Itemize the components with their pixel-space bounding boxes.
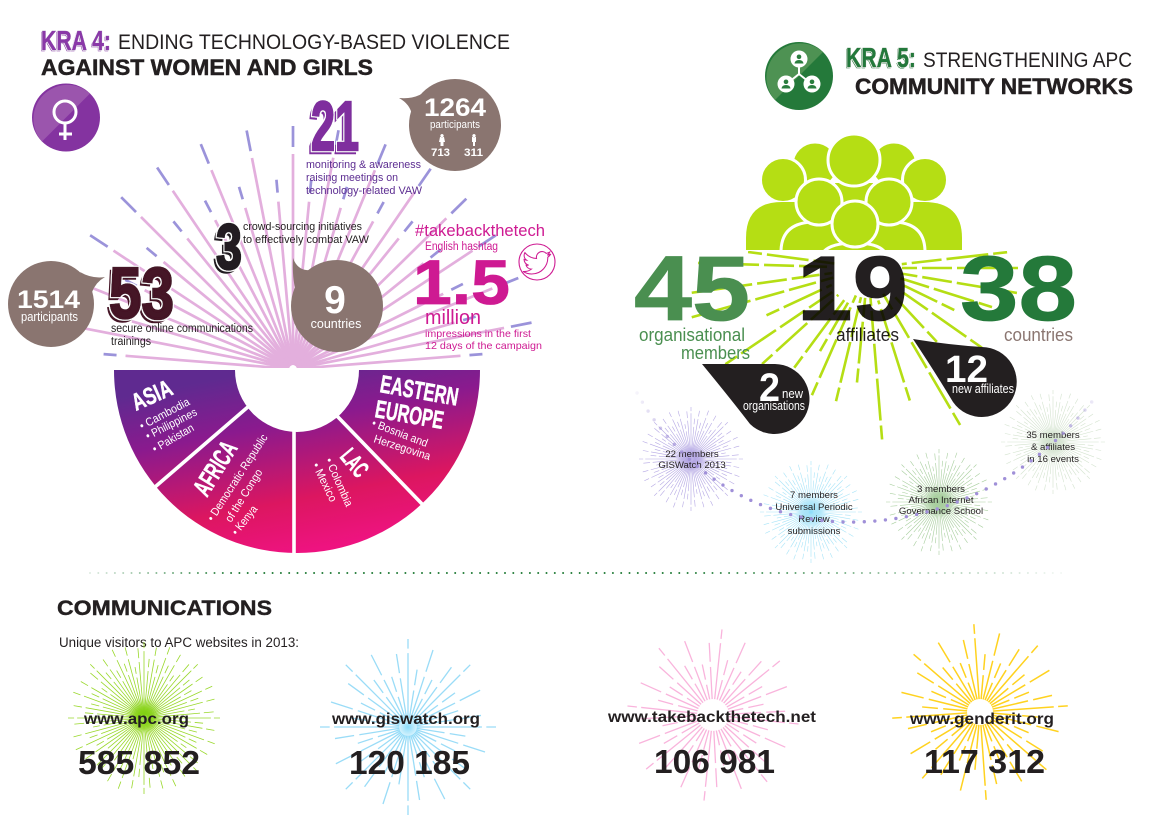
heading: Communications <box>57 597 299 650</box>
callout: 1264 participants <box>399 79 501 171</box>
segment: Eastern Europe: Herzegovina <box>372 433 432 463</box>
stat: 53 secure online communications trainings: secure online communications <box>111 323 253 335</box>
burst: African Internet Governance School members <box>879 442 999 562</box>
callout: 1264 participants: 1264 <box>424 94 486 122</box>
icon: female figure <box>439 134 445 146</box>
burst: genderit.org visitors: www.genderit.org <box>909 711 1054 728</box>
burst: GISWatch members <box>632 400 750 518</box>
burst: GISWatch members: GISWatch 2013 <box>658 460 726 471</box>
burst: GISWatch members: 22 members <box>665 449 719 460</box>
segment: LAC: LAC <box>334 444 374 483</box>
callout: 2 new organisations: 2 <box>759 366 780 410</box>
burst: genderit.org visitors: 117 312 <box>924 743 1045 780</box>
burst: Universal Periodic Review members: Universal Periodic <box>775 502 853 513</box>
segment: Asia <box>127 375 199 456</box>
chart: regional semicircle <box>114 370 480 556</box>
callout: 2 new organisations <box>702 364 809 434</box>
heading: KRA 4: AGAINST WOMEN AND GIRLS <box>41 55 373 80</box>
stat: 38 countries: 38 <box>960 238 1077 340</box>
stat: takebackthetech hashtag: 1.5 <box>413 248 510 318</box>
segment: Eastern Europe <box>370 370 461 463</box>
icon: community network <box>765 42 833 110</box>
chart: radiating lime rays <box>692 252 1018 439</box>
callout: 2 new organisations: new <box>782 387 804 401</box>
stat: 19 affiliates: 19 <box>797 238 908 340</box>
stat: 3 crowd-sourcing initiatives: crowd-sourcing initiatives <box>243 221 362 233</box>
callout: 1514 participants: participants <box>21 310 78 324</box>
callout: 2 new organisations: organisations <box>743 399 805 413</box>
burst: Universal Periodic Review members: Review <box>798 514 830 525</box>
segment: Eastern Europe: EASTERN <box>378 370 461 412</box>
segment: Africa: of the Congo <box>223 467 265 525</box>
burst: apc.org visitors: www.apc.org <box>83 711 189 728</box>
heading: KRA 5: COMMUNITY NETWORKS <box>855 74 1133 99</box>
callout: 12 new affiliates: new affiliates <box>952 382 1014 396</box>
segment: LAC: • Mexico <box>309 461 339 504</box>
burst: giswatch.org visitors <box>315 634 501 818</box>
segment: Asia: ASIA <box>127 375 177 416</box>
callout: 9 countries: countries <box>311 317 361 331</box>
burst: giswatch.org visitors: www.giswatch.org <box>331 711 480 728</box>
stat: takebackthetech hashtag: English hashtag <box>425 241 498 253</box>
burst: genderit.org visitors <box>881 613 1079 811</box>
callout: 1264 participants: participants <box>430 119 480 131</box>
segment: Eastern Europe: EUROPE <box>373 395 446 435</box>
heading: KRA 5: KRA 5: <box>846 42 916 73</box>
burst: events members <box>994 383 1112 501</box>
burst: Universal Periodic Review members <box>754 455 868 569</box>
callout: 12 new affiliates: 12 <box>945 349 988 391</box>
icon: crowd of people <box>746 136 962 250</box>
burst: African Internet Governance School members: 3 members <box>917 484 965 495</box>
stat: 45 organisational members: 45 <box>634 238 750 340</box>
segment: Asia: • Philippines <box>144 406 199 443</box>
heading: KRA 5: STRENGTHENING APC <box>923 49 1132 72</box>
callout: 1514 participants: 1514 <box>17 286 80 314</box>
stat: 38 countries: countries <box>1004 325 1073 345</box>
segment: Asia: • Cambodia <box>138 396 192 433</box>
burst: apc.org visitors: 585 852 <box>78 744 200 781</box>
chart: radiating activity rays <box>54 126 532 369</box>
stat: takebackthetech hashtag: 12 days of the campaign <box>425 340 542 352</box>
callout: 9 countries: 9 <box>324 279 346 322</box>
stat: 45 organisational members: organisational <box>639 325 745 345</box>
dotted connector between member bursts <box>637 393 1098 522</box>
segment: LAC: • Colombia <box>322 456 355 509</box>
stat: 3 crowd-sourcing initiatives <box>216 211 370 283</box>
stat: 21 monitoring meetings <box>306 87 423 197</box>
heading: KRA 4: ENDING TECHNOLOGY-BASED VIOLENCE <box>118 31 510 54</box>
stat: 21 monitoring meetings: 21 <box>311 87 359 165</box>
icon: male figure <box>472 134 476 146</box>
burst: African Internet Governance School members: African Internet <box>908 495 974 506</box>
stat: 19 affiliates: affiliates <box>836 325 899 345</box>
icon: venus symbol <box>32 84 100 152</box>
segment: Africa: • Kenya <box>230 503 261 538</box>
segment: Africa <box>187 432 271 538</box>
heading: Communications: Unique visitors to APC websites in 2013: <box>59 635 299 650</box>
burst: Universal Periodic Review members: 7 members <box>790 490 838 501</box>
segment: Africa: • Democratic Republic <box>205 432 271 524</box>
heading: Communications: COMMUNICATIONS <box>57 597 272 620</box>
burst: events members: & affiliates <box>1031 442 1075 453</box>
callout: 1514 participants <box>8 261 105 347</box>
stat: takebackthetech hashtag: million <box>425 307 481 329</box>
stat: takebackthetech hashtag <box>413 221 545 352</box>
stat: 21 monitoring meetings: technology-related VAW <box>306 185 423 197</box>
segment: Eastern Europe: • Bosnia and <box>370 418 429 450</box>
segment: LAC <box>309 444 374 509</box>
stat: 3 crowd-sourcing initiatives: 3 <box>216 211 242 283</box>
callout: 1264 participants: 713 <box>431 147 450 159</box>
stat: 45 organisational members: members <box>681 343 750 363</box>
burst: events members: in 16 events <box>1027 454 1079 465</box>
stat: 53 secure online communications trainings: trainings <box>111 336 151 348</box>
stat: 53 secure online communications trainings: 53 <box>109 254 174 334</box>
segment: Asia: • Pakistan <box>150 422 196 456</box>
segment: Africa: AFRICA <box>187 435 243 501</box>
callout: 12 new affiliates <box>913 339 1017 417</box>
burst: African Internet Governance School members: Governance School <box>899 506 983 517</box>
heading: KRA 5 <box>846 42 1133 99</box>
callout: 9 countries <box>291 258 383 352</box>
burst: Universal Periodic Review members: submissions <box>788 526 841 537</box>
stat: takebackthetech hashtag: #takebackthetech <box>415 221 545 240</box>
burst: events members: 35 members <box>1026 430 1080 441</box>
stat: 3 crowd-sourcing initiatives: to effectively combat VAW <box>243 234 370 246</box>
stat: takebackthetech hashtag: impressions in the first <box>425 328 531 340</box>
stat: 21 monitoring meetings: monitoring & awareness <box>306 159 421 171</box>
burst: giswatch.org visitors: 120 185 <box>349 744 470 781</box>
stat: 53 secure online communications trainings <box>109 254 253 348</box>
burst: takebackthetech.net visitors <box>607 615 817 815</box>
stat: 21 monitoring meetings: raising meetings on <box>306 172 398 184</box>
heading: KRA 4: KRA 4: <box>41 25 111 56</box>
burst: takebackthetech.net visitors: 106 981 <box>654 743 775 780</box>
burst: apc.org visitors <box>58 632 230 804</box>
burst: takebackthetech.net visitors: www.takebackthetech.net <box>607 709 817 726</box>
callout: 1264 participants: 311 <box>464 147 483 159</box>
icon: twitter bird <box>519 244 555 280</box>
heading: KRA 4 <box>41 25 510 80</box>
